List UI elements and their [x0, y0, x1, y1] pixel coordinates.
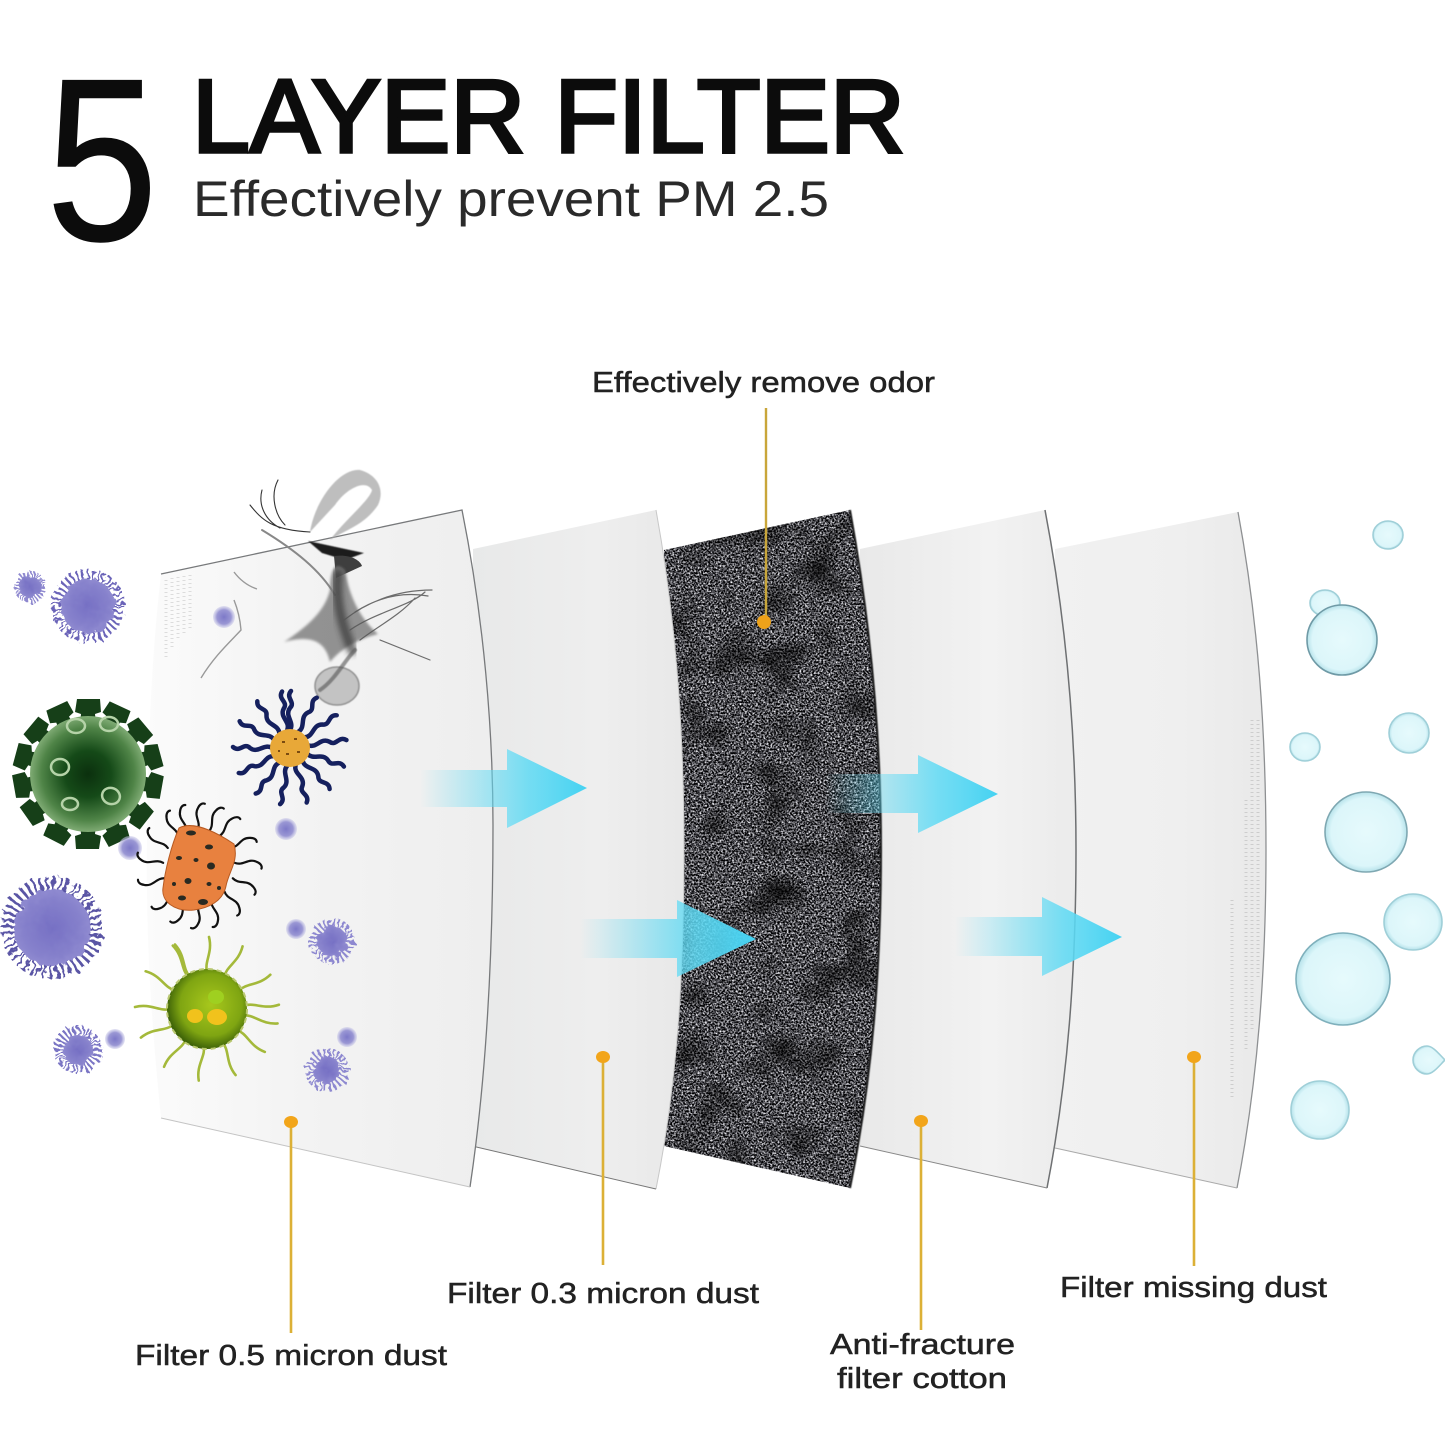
bubble [1389, 713, 1429, 753]
bubble [1384, 894, 1442, 950]
bubble [1291, 1081, 1349, 1139]
arrow 3 [825, 755, 998, 833]
callout label: Effectively remove odor [592, 367, 935, 399]
virus: dot bottom [337, 1027, 357, 1047]
title [46, 31, 905, 290]
filter layer 3: activated carbon [664, 510, 881, 1188]
callout label: Anti-fracture [830, 1329, 1015, 1361]
callout: remove odor [592, 367, 935, 629]
callout: missing dust [1060, 1051, 1327, 1304]
bubbles [1290, 521, 1445, 1139]
filter layer 2 [472, 510, 684, 1189]
callout label: Filter 0.5 micron dust [135, 1340, 447, 1372]
bubble [1296, 933, 1390, 1025]
bubble [1373, 521, 1403, 549]
smoke [250, 470, 432, 705]
callout pin [1187, 1051, 1201, 1266]
callout pin [757, 408, 771, 629]
callout: 0.5 micron [135, 1116, 447, 1372]
virus: large green [12, 699, 164, 849]
virus: dot mid [275, 818, 297, 840]
callout: anti-fracture [830, 1115, 1015, 1395]
germ: orange [137, 803, 262, 928]
bubble [1310, 590, 1340, 616]
germ: blue tentacles [233, 691, 347, 805]
callout pin [284, 1116, 298, 1333]
callout label: filter cotton [837, 1363, 1007, 1395]
germ: green spiky [135, 937, 279, 1081]
thin swirl [201, 572, 257, 678]
virus: large purple left [10, 886, 94, 970]
bubble [1325, 792, 1407, 872]
virus: dot lower [286, 919, 306, 939]
numeral 5: 5 [46, 31, 158, 290]
callout pin [596, 1051, 610, 1265]
bubble [1307, 605, 1377, 675]
virus: blurry dot by green virus [118, 836, 142, 860]
filter layer 5 [1055, 512, 1266, 1188]
virus: dot top of layer [213, 606, 235, 628]
virus: purple top [58, 576, 118, 636]
heading: LAYER FILTER [192, 59, 905, 175]
subheading: Effectively prevent PM 2.5 [193, 171, 829, 227]
virus: purple bottom left [60, 1032, 96, 1068]
callout label: Filter 0.3 micron dust [447, 1278, 759, 1310]
arrow 2 [580, 900, 756, 977]
callout: 0.3 micron [447, 1051, 759, 1310]
virus: small dot bottom left [105, 1029, 125, 1049]
filter layer 4 [860, 510, 1076, 1188]
virus: purple bottom [310, 1053, 344, 1087]
arrow 1 [420, 749, 587, 828]
bubble [1413, 1046, 1445, 1074]
virus: small purple top left [17, 574, 43, 600]
bubble [1290, 733, 1320, 761]
callout label [830, 1329, 1015, 1395]
arrow 4 [955, 897, 1122, 976]
callout pin [914, 1115, 928, 1330]
filter layer 1 [147, 510, 493, 1187]
callout label: Filter missing dust [1060, 1272, 1327, 1304]
virus: purple lower [314, 923, 350, 959]
